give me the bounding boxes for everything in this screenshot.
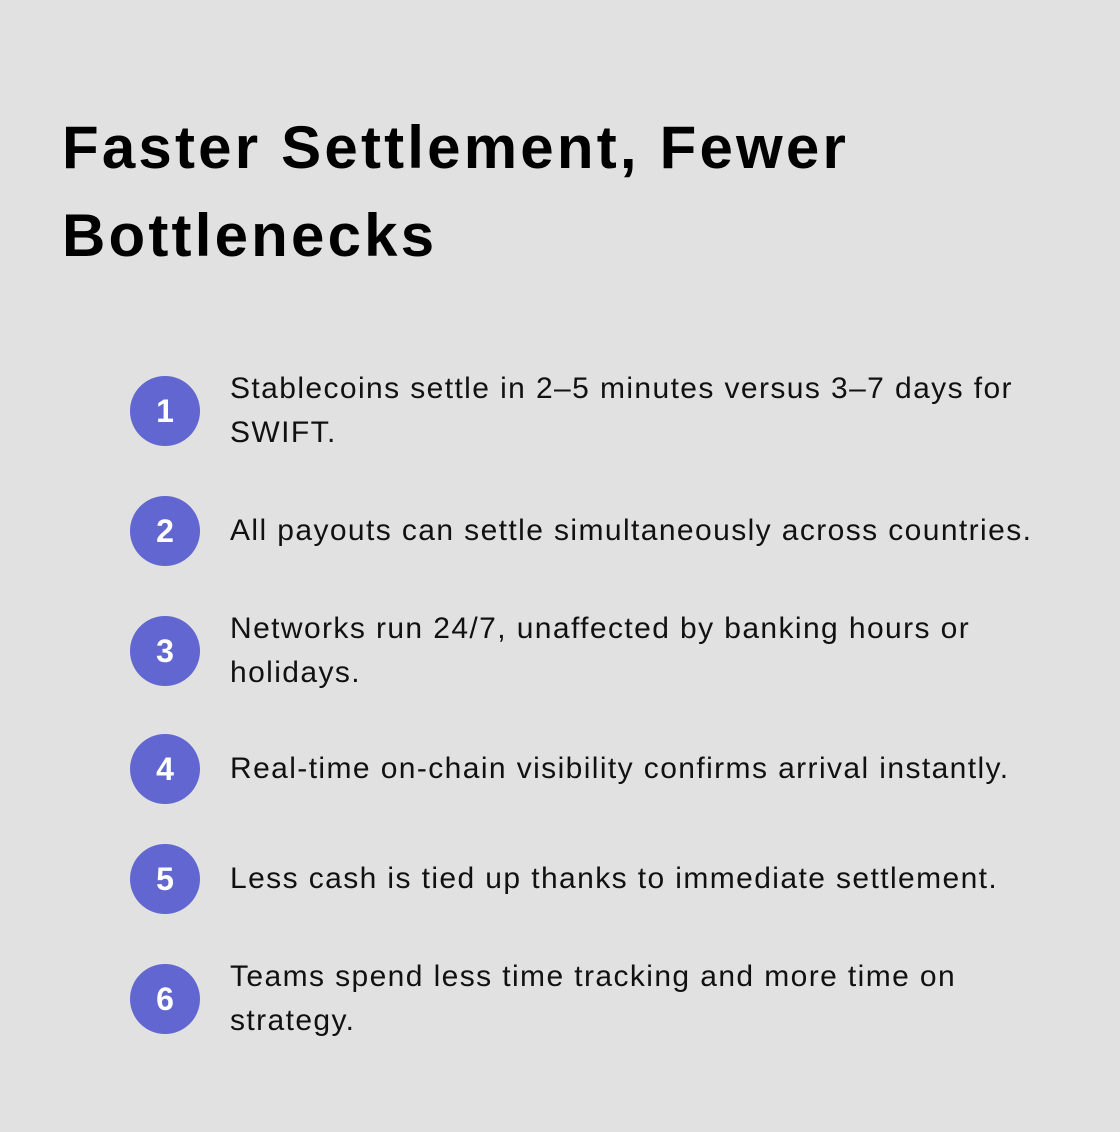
item 4	[130, 734, 1009, 804]
item 3	[130, 612, 970, 689]
item 6	[130, 960, 956, 1037]
item 1: Stablecoins settle in 2–5 minutes versus 3–7 days for	[230, 372, 1013, 405]
item 6: strategy.	[230, 1004, 355, 1037]
title	[62, 114, 849, 269]
item 1	[130, 372, 1013, 449]
item 5	[130, 844, 998, 914]
item 2: 2	[156, 513, 174, 549]
item 3: 3	[156, 633, 174, 669]
item 1: 1	[156, 393, 174, 429]
item 4: 4	[156, 751, 174, 787]
item 2: All payouts can settle simultaneously across countries.	[230, 514, 1032, 547]
item 6: Teams spend less time tracking and more time on	[230, 960, 956, 993]
item 3: Networks run 24/7, unaffected by banking hours or	[230, 612, 970, 645]
item 6: 6	[156, 981, 174, 1017]
item 4: Real-time on-chain visibility confirms arrival instantly.	[230, 752, 1009, 785]
item 2	[130, 496, 1032, 566]
item 3: holidays.	[230, 656, 361, 689]
title: Faster Settlement, Fewer	[62, 114, 849, 181]
item 5: Less cash is tied up thanks to immediate settlement.	[230, 862, 998, 895]
title: Bottlenecks	[62, 202, 437, 269]
item 5: 5	[156, 861, 174, 897]
item 1: SWIFT.	[230, 416, 337, 449]
